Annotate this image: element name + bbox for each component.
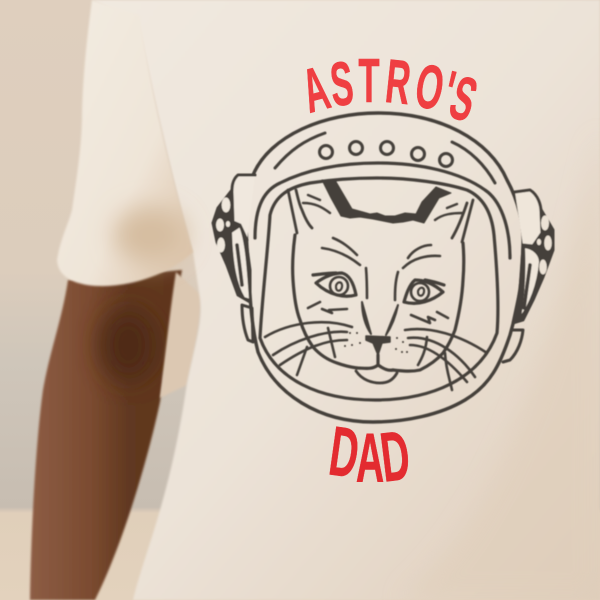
heading: ASTRO'S: ': [437, 58, 461, 127]
helmet rivets: [320, 142, 452, 166]
sleeve shadow: [114, 207, 186, 263]
cat nose: [366, 336, 390, 355]
cat brows: [322, 238, 440, 268]
sleeve: [57, 0, 193, 286]
left ear piece: [213, 175, 255, 342]
helmet highlight left: [275, 133, 325, 168]
shirt underside by armpit: [160, 272, 201, 398]
heading: DAD: D: [325, 413, 364, 494]
right side shirt shadow: [400, 130, 600, 600]
astronaut helmet and cat line art: [213, 113, 553, 422]
whiskers and collar lines: [265, 322, 487, 390]
cat inner ear marks: [303, 195, 463, 220]
heading: ASTRO'S: S: [327, 48, 357, 120]
cat right eye: [404, 280, 444, 303]
helmet highlight right: [452, 142, 495, 183]
cat ears: [288, 190, 473, 242]
cat freckles: [344, 332, 408, 353]
cat head outline: [293, 235, 464, 371]
heading: ASTRO'S: A: [295, 53, 336, 126]
heading: DAD: D: [376, 417, 414, 498]
heading: ASTRO'S: [295, 46, 485, 135]
cat mouth: [357, 355, 393, 370]
elbow shadow: [98, 307, 158, 383]
heading: ASTRO'S: S: [442, 62, 485, 135]
visor: [260, 178, 498, 400]
cat nose bridge: [366, 268, 398, 300]
cat left eye: [313, 273, 356, 296]
arm: [30, 270, 182, 600]
cat whisker marks: [308, 302, 448, 323]
heading: DAD: A: [356, 420, 384, 498]
right ear piece: [503, 190, 553, 362]
heading: DAD: [325, 413, 414, 498]
cat forehead jagged fur: [322, 180, 451, 223]
heading: ASTRO'S: R: [383, 46, 414, 118]
heading: ASTRO'S: T: [358, 46, 380, 116]
heading: ASTRO'S: O: [410, 51, 449, 124]
helmet inner band: [255, 163, 510, 258]
helmet outer shell: [246, 113, 523, 422]
